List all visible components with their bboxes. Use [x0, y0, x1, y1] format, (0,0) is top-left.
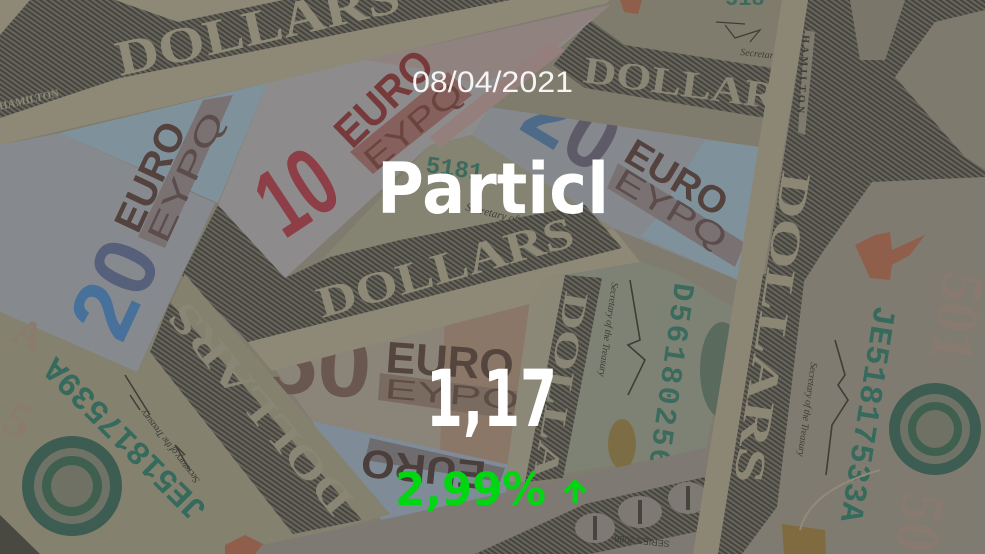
- right vertical dollar note: [693, 0, 985, 554]
- right 20 euro note: [472, 58, 760, 280]
- left 20 euro note: EURO: [106, 115, 195, 239]
- left 20 euro note: [0, 83, 267, 372]
- top centre dollar note: [490, 0, 785, 147]
- centre beige note with serial: [320, 135, 613, 262]
- right vertical dollar note: JE51817533A: [831, 303, 902, 525]
- central vertical dollar note: D56180256: [639, 281, 699, 469]
- icon: up arrow: [565, 482, 585, 503]
- lower left dollar note: A: [6, 307, 51, 360]
- left 20 euro note: EYPQ: [140, 106, 232, 248]
- date: 08/04/2021: [412, 66, 573, 99]
- lower left dollar note: [0, 274, 390, 554]
- seal left: [22, 436, 122, 536]
- lower centre 50 euro note: 50: [261, 312, 374, 417]
- lower left dollar note: Secretary of the Treasury: [138, 407, 202, 485]
- right 20 euro note: EYPQ: [608, 161, 734, 256]
- lower centre 50 euro note: [261, 295, 545, 530]
- lower centre 50 euro note: EURO: [384, 333, 515, 391]
- name heading: Particl: Particl: [377, 148, 609, 230]
- lower left dollar note: DOLLARS: [159, 293, 363, 523]
- left 20 euro note: 20: [49, 224, 180, 353]
- central vertical dollar note: DOLLA: [525, 289, 595, 483]
- central vertical dollar note: Secretary of the Treasury: [596, 282, 620, 378]
- right vertical dollar note: DOLLARS: [724, 168, 819, 487]
- lower left dollar note: JE51817539A: [37, 349, 215, 527]
- centre dollar note: [182, 205, 645, 371]
- bottom dollar note: SERIES 2006: [614, 533, 670, 549]
- centre 10 euro note: [218, 5, 610, 278]
- centre 10 euro note: 10: [235, 126, 357, 258]
- seal right: [889, 383, 981, 475]
- top centre dollar note: Secretary: [740, 47, 779, 62]
- bottom dollar note: [255, 448, 725, 554]
- lower centre 50 euro note: EYPQ: [383, 373, 521, 416]
- centre beige note with serial: 5181: [424, 153, 485, 188]
- right vertical dollar note: Secretary of the Treasury: [795, 362, 819, 458]
- centre 10 euro note: EYPQ: [356, 74, 470, 177]
- right 20 euro note: 20: [507, 58, 638, 193]
- right 20 euro note: EURO: [617, 132, 735, 225]
- central vertical dollar note: [505, 262, 744, 483]
- value: 1,17: 1,17: [426, 355, 557, 445]
- top left dollar note: [0, 0, 620, 145]
- right vertical dollar note: HAMILTON: [795, 35, 811, 114]
- lower centre 50 euro note: EURO: [359, 440, 488, 497]
- centre 10 euro note: EURO: [325, 40, 444, 157]
- percentage change: 2,99%: [395, 463, 546, 516]
- centre dollar note: DOLLARS: [311, 207, 579, 328]
- centre beige note with serial: Secretary of the Treasury: [464, 201, 575, 240]
- top centre dollar note: DOLLAR: [581, 49, 780, 118]
